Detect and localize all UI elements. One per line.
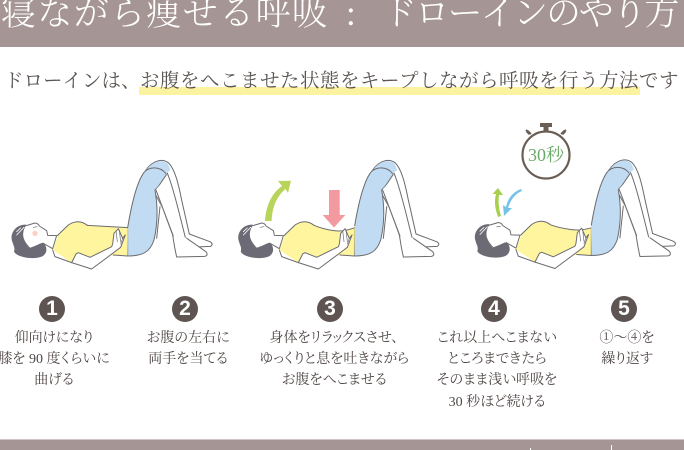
lead text: お腹をへこませた状態をキープしながら呼吸を行う方法です xyxy=(140,71,679,92)
step 4 text xyxy=(437,330,557,410)
step 1 text: 仰向けになり xyxy=(15,331,93,346)
step 5 text xyxy=(599,330,655,367)
step 4 text: そのまま浅い呼吸を xyxy=(437,373,557,388)
figure 2: exhaling, belly pulled in xyxy=(238,160,439,269)
step 3 text: お腹をへこませる xyxy=(281,373,387,388)
step 5 badge: 5 xyxy=(618,297,630,320)
step 3 text xyxy=(259,330,409,388)
icon: green breath arrow xyxy=(265,181,291,221)
step 1 text xyxy=(0,330,110,388)
title xyxy=(1,0,678,33)
lead text: ドローインは、 xyxy=(4,71,141,92)
step 5 badge xyxy=(611,296,637,322)
step 2 badge xyxy=(172,296,198,322)
step 2 badge: 2 xyxy=(179,297,191,320)
step 3 text: ゆっくりと息を吐きながら xyxy=(259,352,409,367)
step 2 text xyxy=(146,330,230,367)
step 1 badge: 1 xyxy=(46,297,58,320)
step 3 badge: 3 xyxy=(324,297,336,320)
step 4 badge: 4 xyxy=(488,297,500,320)
step 4 text: ところまできたら xyxy=(448,352,546,367)
icon: stopwatch xyxy=(522,123,570,178)
figure 3: shallow breathing xyxy=(475,160,675,268)
step 4 text: これ以上へこまない xyxy=(437,331,557,346)
step 5 text: 繰り返す xyxy=(601,352,653,367)
title band xyxy=(0,0,684,47)
icon: blue down arrow xyxy=(503,189,522,216)
footer band xyxy=(0,439,684,450)
step 1 badge xyxy=(39,296,65,322)
stopwatch label: 30秒 xyxy=(528,145,565,165)
step 3 badge xyxy=(317,296,343,322)
step 1 text: 膝を 90 度くらいに xyxy=(0,352,110,367)
step 4 badge xyxy=(481,296,507,322)
highlight under lead text xyxy=(139,87,640,95)
figure 1: lying with knees bent xyxy=(12,160,212,269)
step 4 text: 30 秒ほど続ける xyxy=(449,395,545,410)
icon: green up arrow xyxy=(492,188,503,217)
step 2 text: お腹の左右に xyxy=(146,331,230,346)
step 2 text: 両手を当てる xyxy=(148,352,228,367)
step 3 text: 身体をリラックスさせ、 xyxy=(269,331,399,346)
icon: pink downward arrow xyxy=(323,190,345,228)
step 1 text: 曲げる xyxy=(34,373,74,388)
step 5 text: ①〜④を xyxy=(599,331,655,346)
